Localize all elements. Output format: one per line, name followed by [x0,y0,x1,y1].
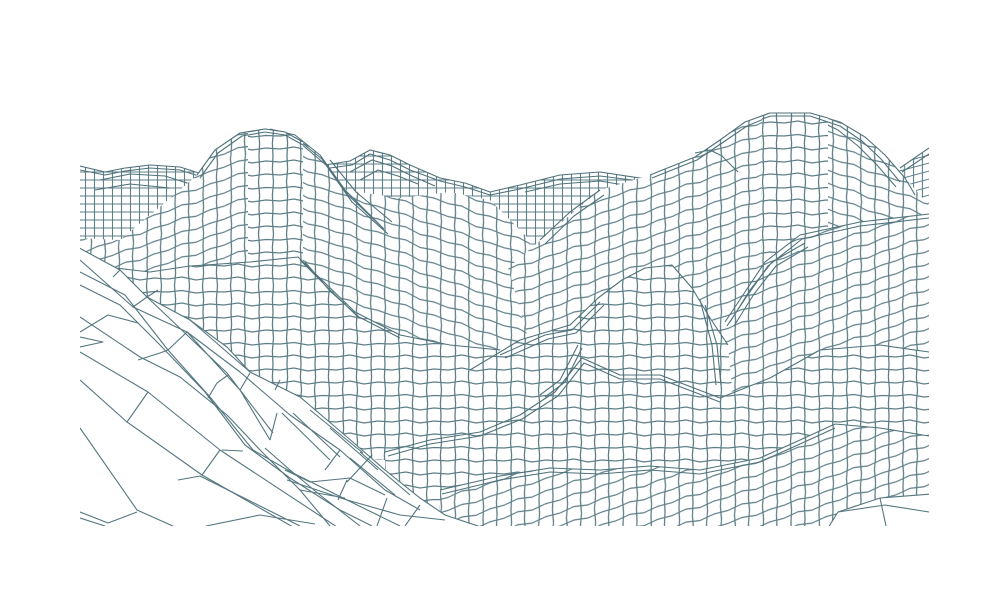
big right hill, left slope [508,112,770,336]
panel: wireframe terrain [80,112,929,526]
large foreground cells, bottom right [828,494,931,528]
large foreground cells, bottom left [70,243,490,530]
left middle ridge [116,256,504,460]
far right corner hill [900,148,929,204]
big left hill, right slope [270,129,540,350]
lower front ridge [440,424,929,526]
big left hill, left slope [80,128,285,272]
back slope behind central valley [346,190,530,270]
big right hill, rounded summit [762,112,828,266]
far left hills [80,164,198,240]
front middle ridge [385,345,929,526]
far central hills [327,150,643,245]
central peak [470,265,735,420]
big right hill, right slope [810,112,929,228]
big left hill, rounded summit [248,128,304,261]
right upper ridge [724,214,929,392]
